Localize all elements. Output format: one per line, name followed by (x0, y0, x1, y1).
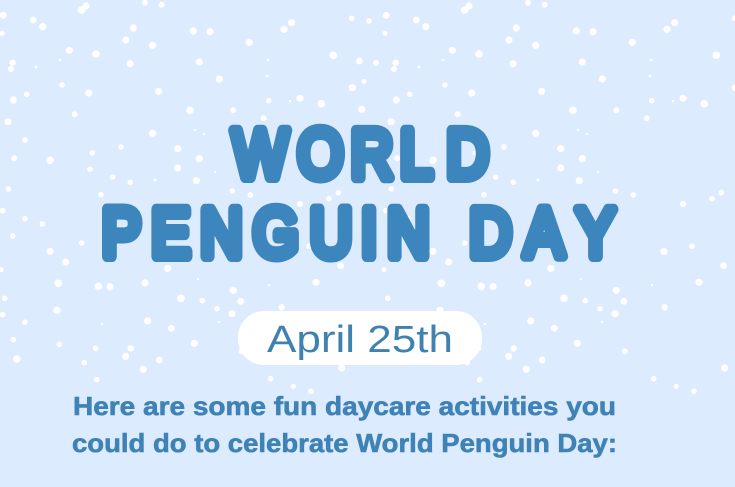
intro line 1: Here are some fun daycare activities you (73, 391, 616, 421)
title line: WORLD: WORLD (232, 115, 489, 193)
title line: PENGUIN DAY: PENGUIN DAY (102, 194, 615, 272)
intro text (72, 391, 617, 458)
title: World Penguin Day (102, 115, 615, 272)
date pill (238, 311, 482, 365)
intro line 2: could do to celebrate World Penguin Day: (72, 428, 617, 458)
date text: April 25th (267, 319, 453, 361)
